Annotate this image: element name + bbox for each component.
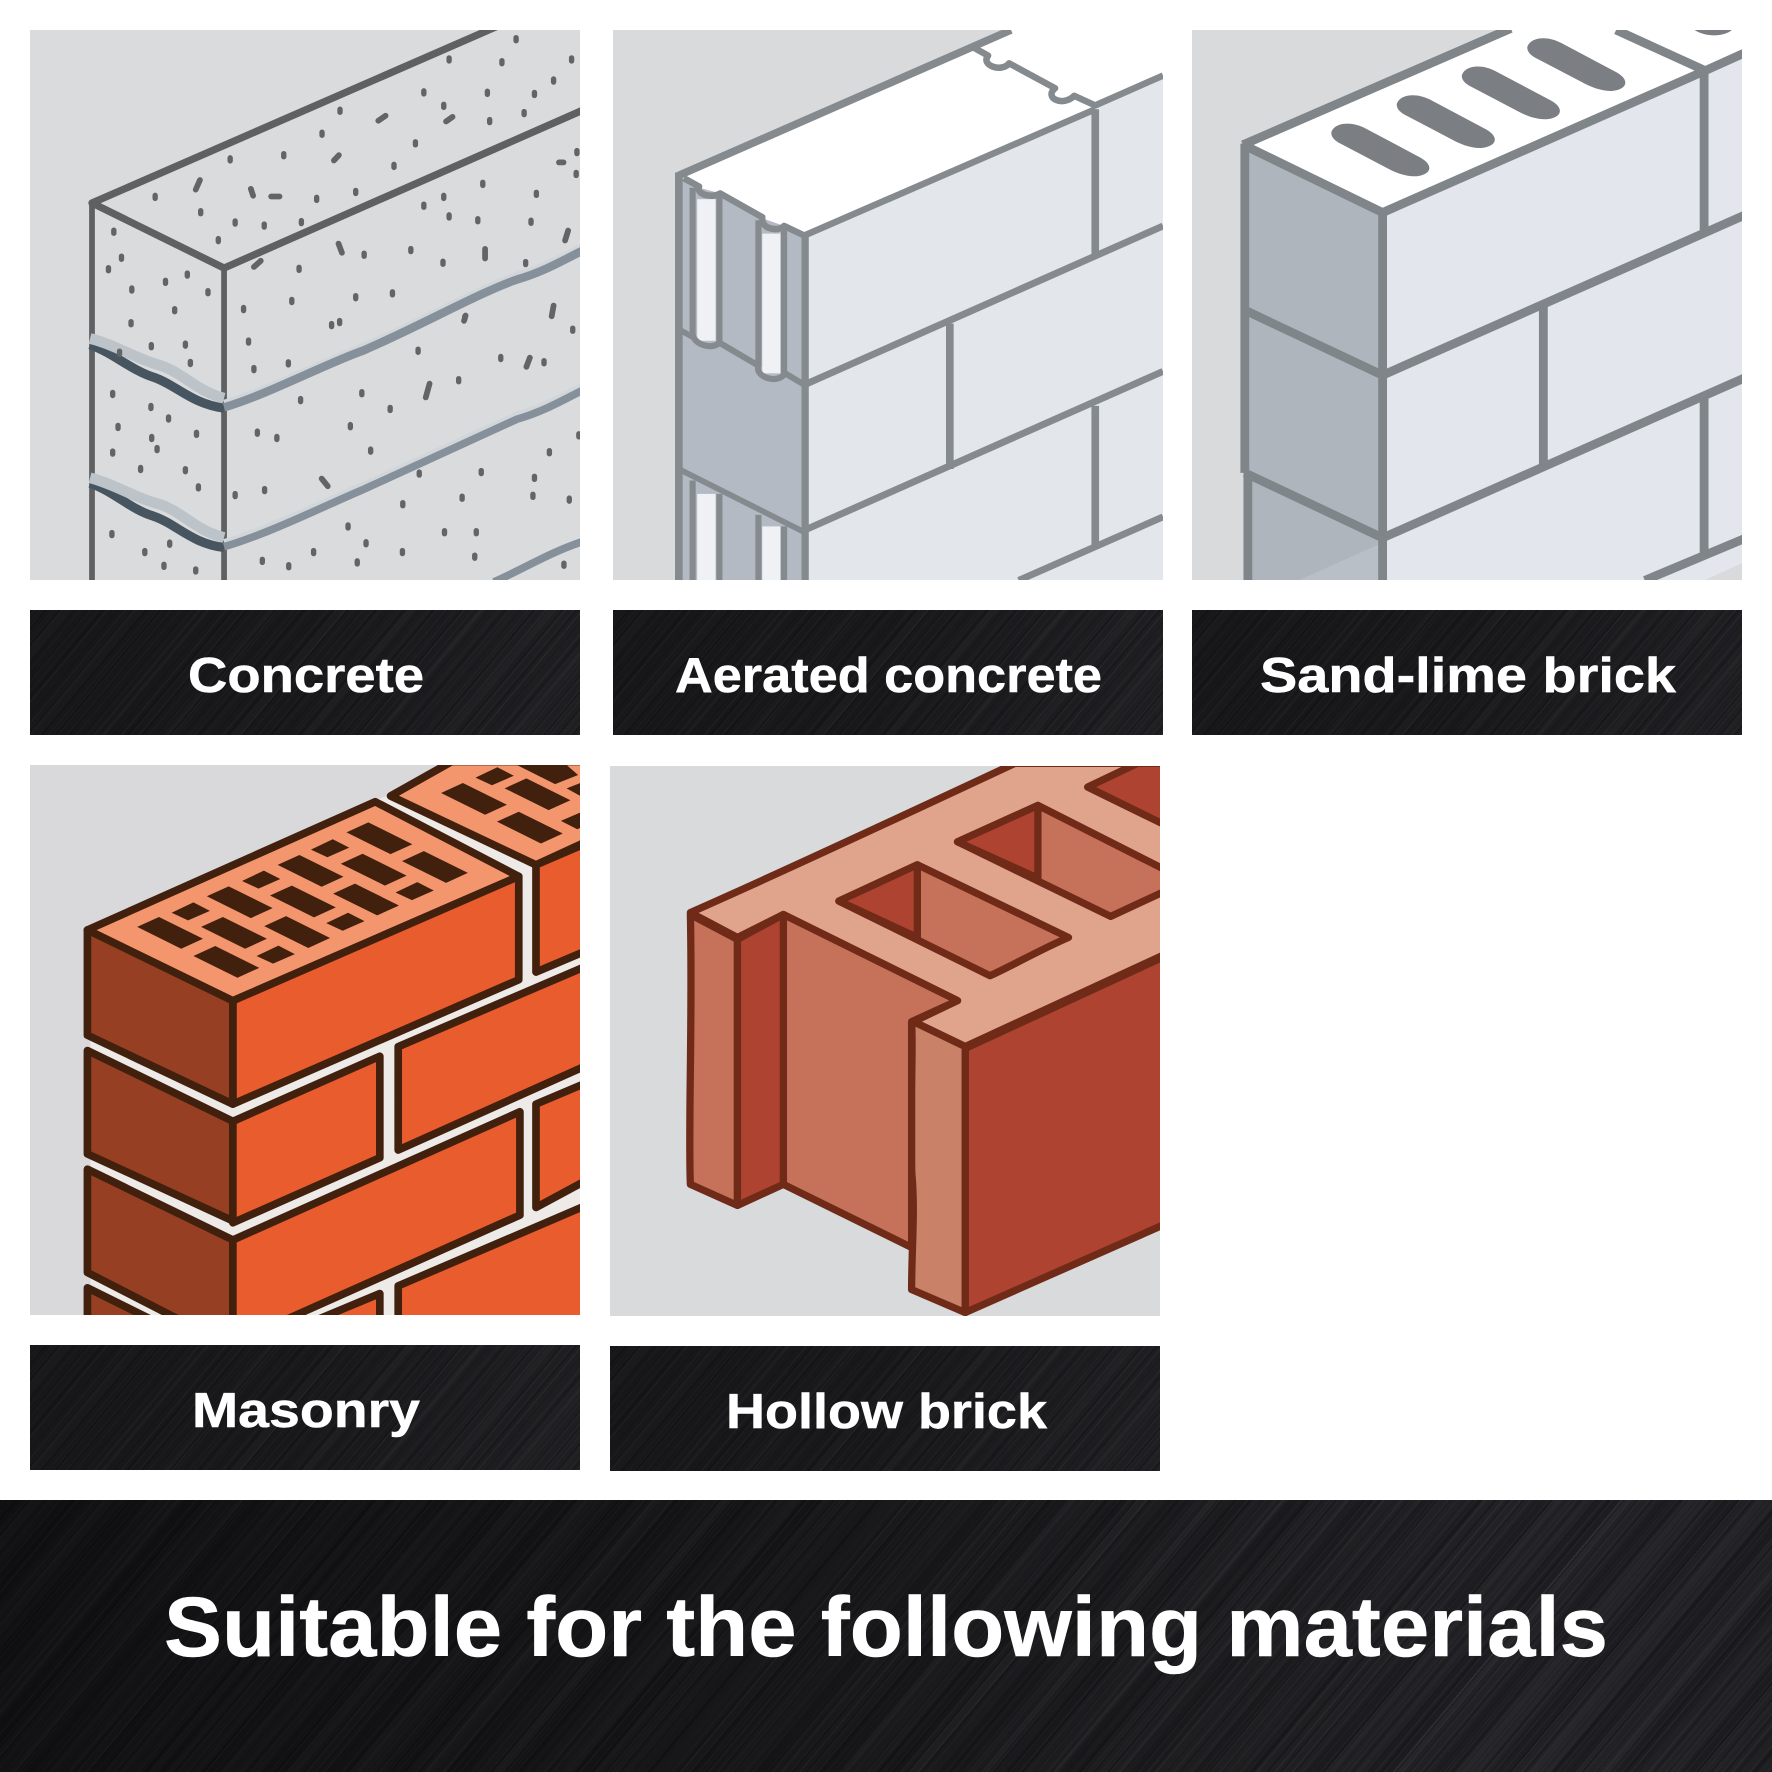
- panel: sand-lime brick illustration: [1192, 30, 1742, 580]
- label: concrete: Concrete: [188, 649, 424, 703]
- label: aerated concrete: Aerated concrete: [675, 649, 1102, 703]
- panel: concrete illustration: [30, 30, 580, 580]
- label: masonry: Masonry: [192, 1384, 420, 1438]
- title banner: [0, 1500, 1772, 1772]
- label: masonry: [30, 1345, 580, 1470]
- panel: hollow brick illustration: [610, 766, 1160, 1316]
- label: sand-lime brick: Sand-lime brick: [1260, 649, 1677, 703]
- label: hollow brick: [610, 1346, 1160, 1471]
- title banner: Suitable for the following materials: [164, 1580, 1608, 1674]
- panel: masonry illustration: [30, 765, 580, 1315]
- panel: aerated concrete illustration: [613, 30, 1163, 580]
- label: aerated concrete: [613, 610, 1163, 735]
- label: hollow brick: Hollow brick: [726, 1385, 1048, 1439]
- label: sand-lime brick: [1192, 610, 1742, 735]
- label: concrete: [30, 610, 580, 735]
